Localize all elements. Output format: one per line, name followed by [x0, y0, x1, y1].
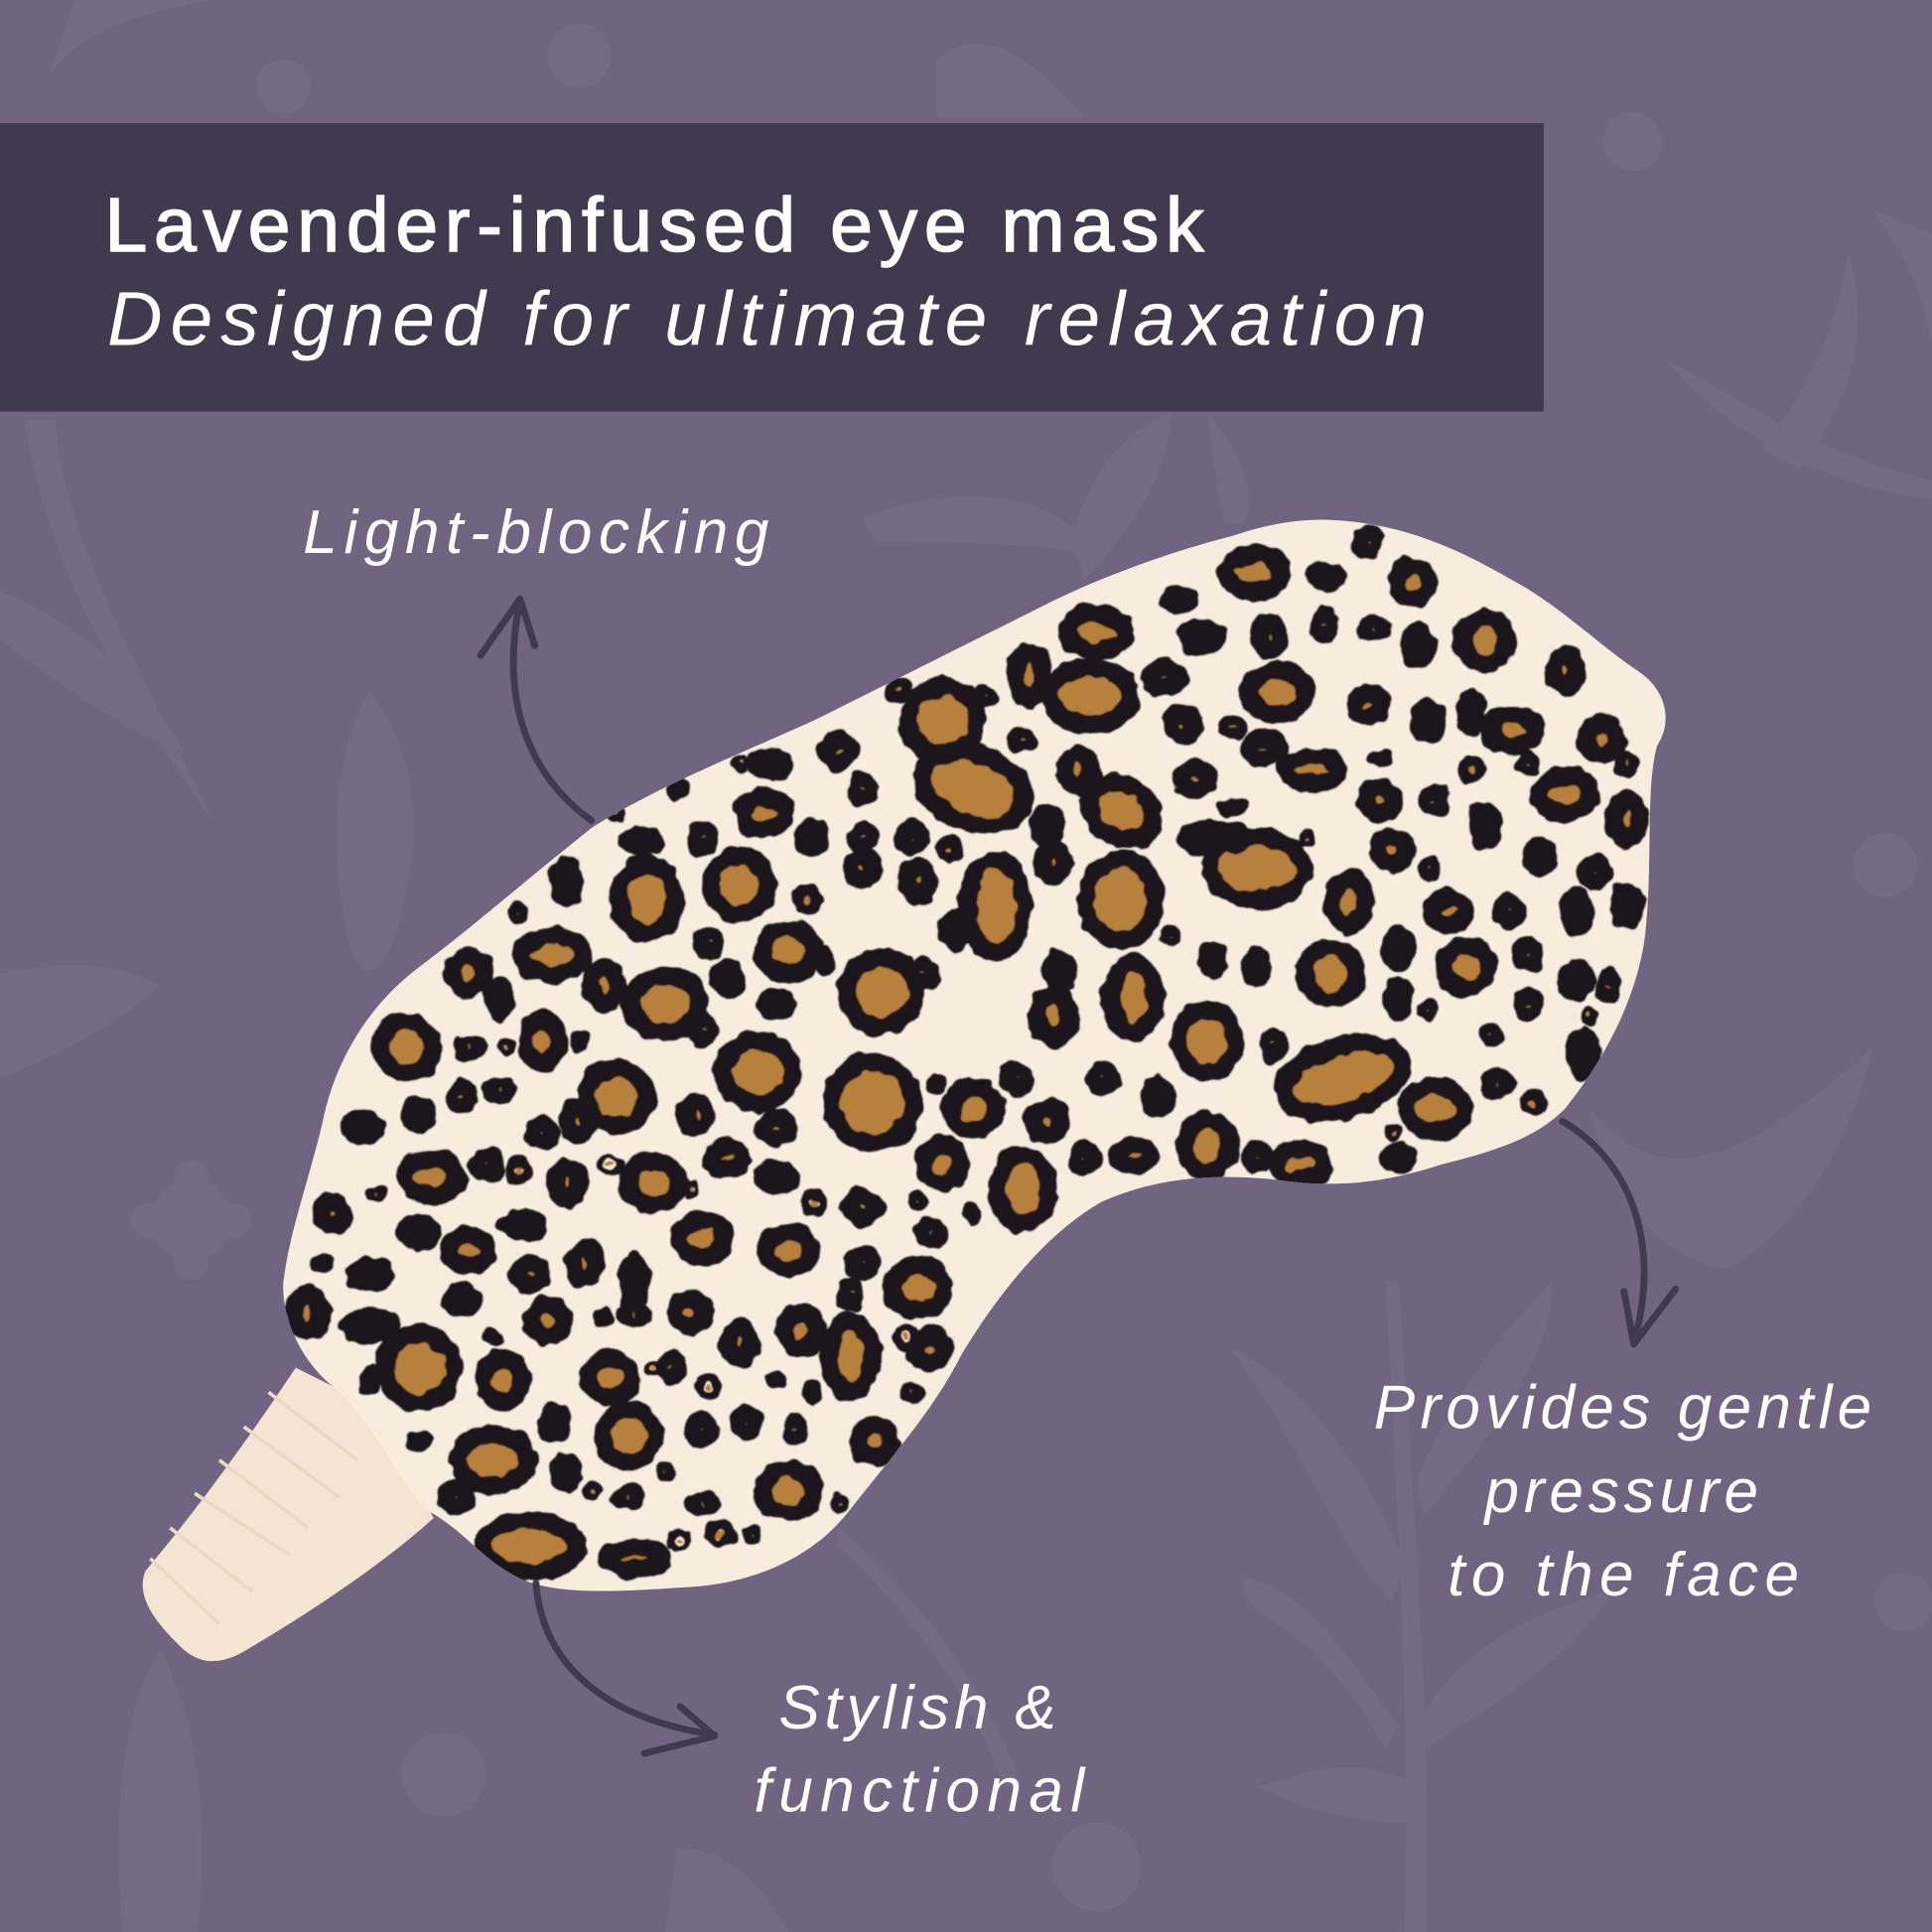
label: stylish and functional: [755, 1674, 1086, 1825]
subtitle: Designed for ultimate relaxation: [107, 277, 1427, 362]
header banner: [0, 123, 1544, 412]
elastic strap: [143, 1368, 434, 1661]
label: gentle pressure: to the face: [1448, 1541, 1799, 1609]
label: gentle pressure: pressure: [1482, 1457, 1758, 1526]
label: gentle pressure: Provides gentle: [1374, 1373, 1871, 1442]
label: stylish and functional: functional: [755, 1756, 1086, 1825]
eye mask illustration: [143, 492, 1701, 1661]
title: Lavender-infused eye mask: [104, 183, 1204, 268]
label: light-blocking: Light-blocking: [303, 498, 768, 567]
label: stylish and functional: Stylish &: [778, 1674, 1056, 1742]
leopard spots: [295, 533, 1640, 1573]
arrow: to light-blocking: [481, 599, 592, 821]
arrow: to gentle pressure: [1563, 1121, 1676, 1344]
arrow: to stylish and functional: [536, 1584, 715, 1753]
label: gentle pressure: [1374, 1373, 1871, 1609]
mask body: [283, 520, 1666, 1590]
